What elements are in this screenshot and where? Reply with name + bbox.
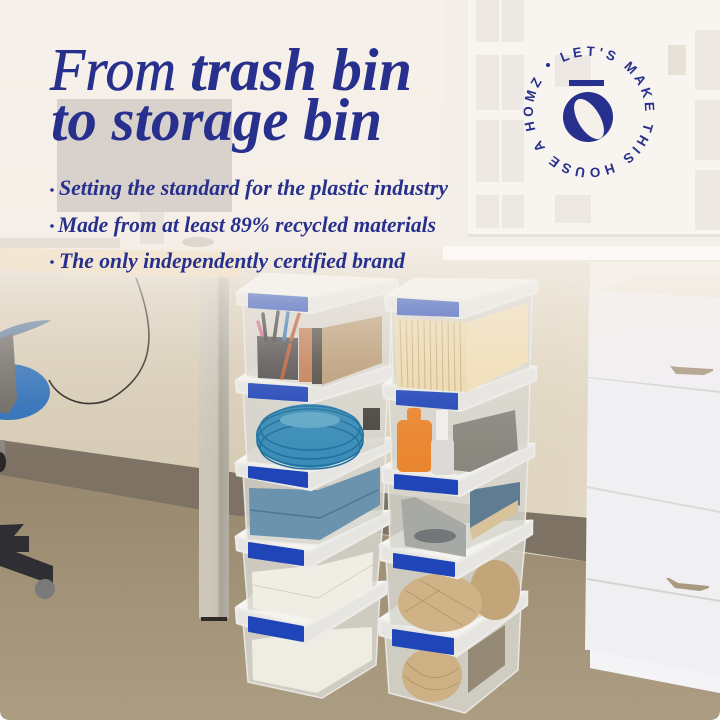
bin 1: file folders — [385, 279, 537, 392]
window with blurred buildings — [443, 0, 720, 260]
headline: trash bin — [190, 37, 412, 103]
right stack of storage bins — [379, 279, 537, 713]
bin 4: yarn — [380, 521, 532, 632]
cabinet handle bottom — [666, 578, 709, 591]
desk with cable and leg — [0, 248, 240, 621]
bin 2: blue coil — [236, 364, 393, 470]
rounded image corners — [0, 710, 720, 720]
bin 3: stapler and towels — [382, 444, 534, 557]
headline — [49, 37, 412, 153]
filing cabinet — [585, 262, 720, 693]
bin 5: yarn — [379, 592, 527, 713]
bullet list: Setting the standard for the plastic industry — [59, 175, 448, 200]
bin 1: pens and books — [237, 274, 397, 388]
bin 2: bottle, spray, stapler — [383, 367, 536, 475]
bin 5: white paper — [236, 582, 386, 698]
office chair — [0, 320, 55, 599]
headline: to storage bin — [51, 87, 382, 153]
logo badge: LET'S MAKE THIS HOUSE A HOMZ — [524, 46, 654, 178]
cabinet handle top — [670, 366, 713, 375]
bin 3: blue towels — [236, 438, 392, 545]
bin 4: white paper — [236, 511, 390, 620]
bullet list: The only independently certified brand — [59, 248, 406, 273]
headline: From — [49, 37, 176, 103]
bullet list: Made from at least 89% recycled materials — [57, 212, 436, 237]
monitor and keyboard on desk — [0, 99, 240, 278]
bullet list — [50, 175, 448, 273]
left stack of storage bins — [236, 274, 397, 698]
